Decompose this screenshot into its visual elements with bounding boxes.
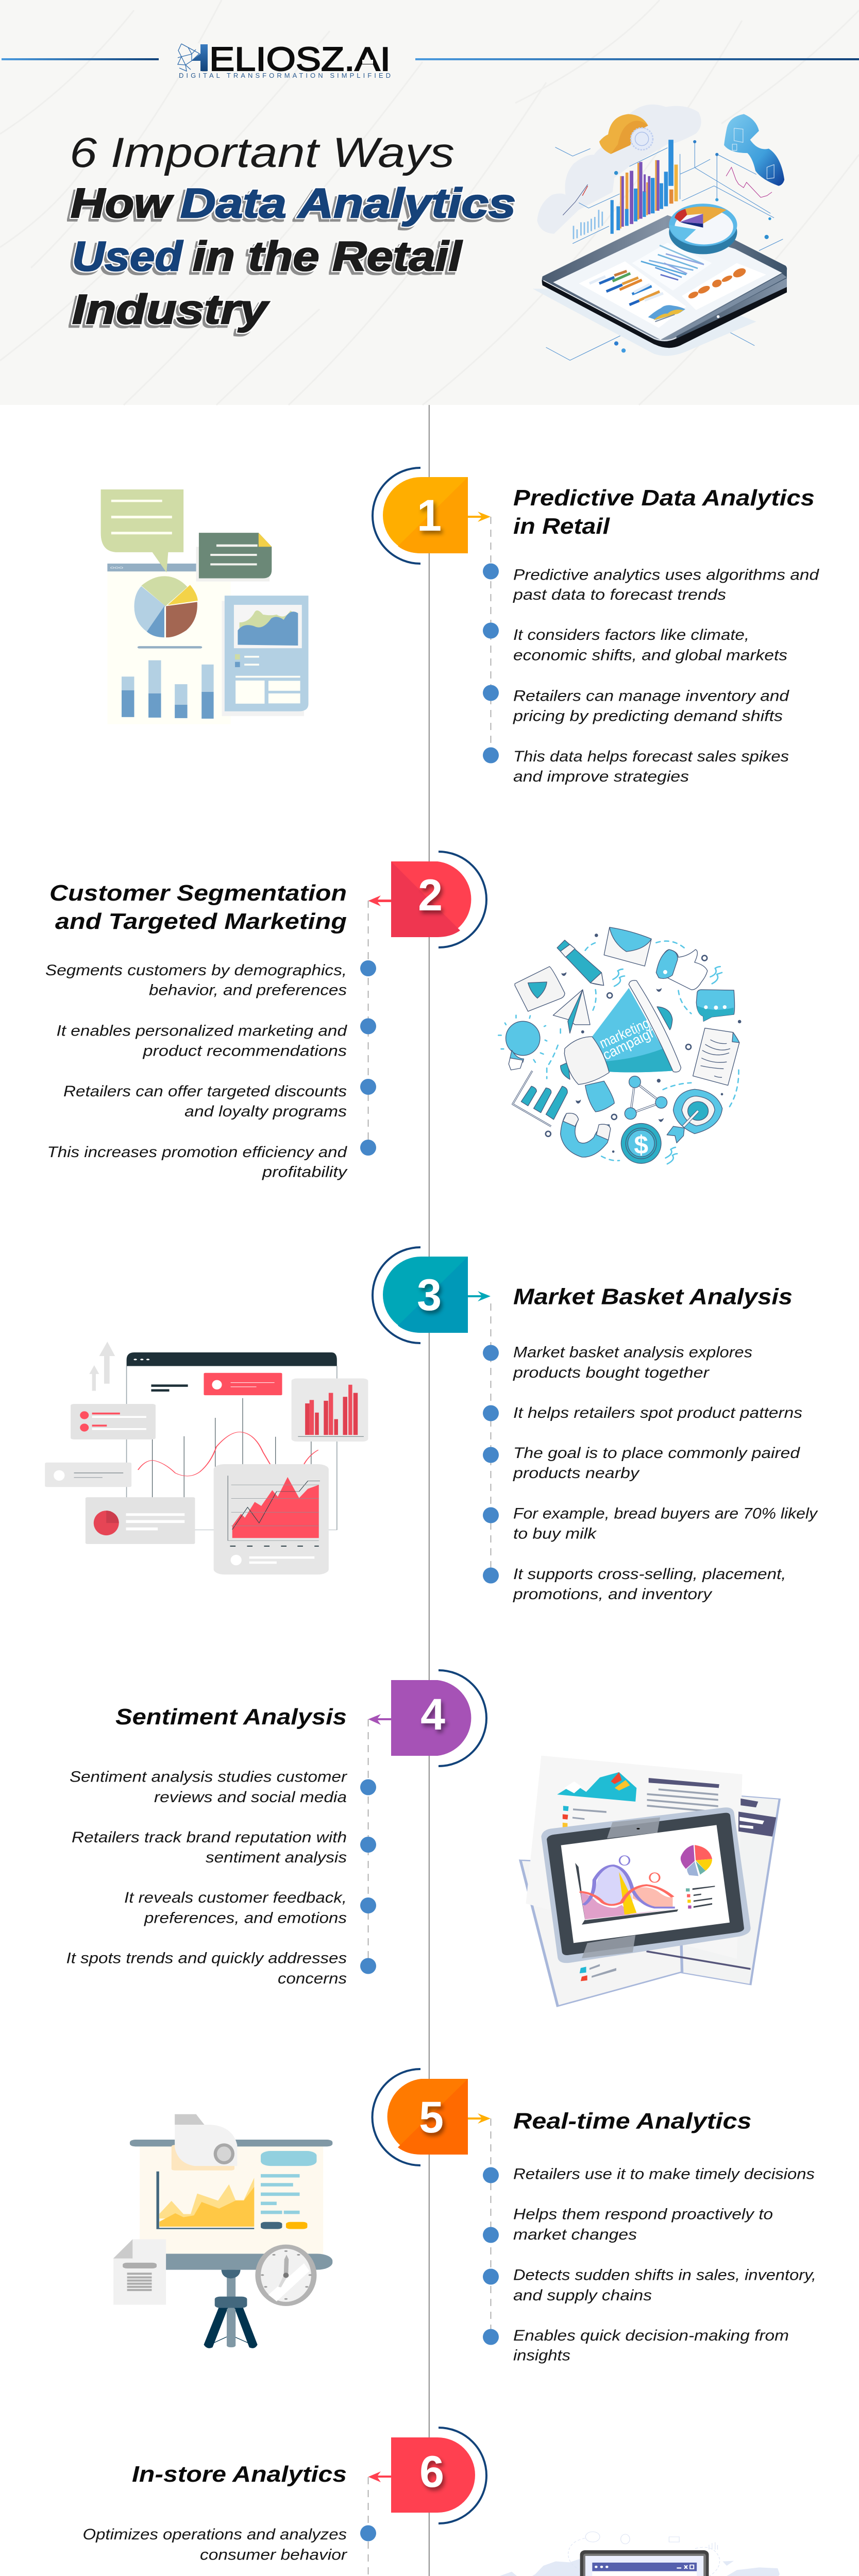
heading: Real-time Analytics — [513, 2108, 751, 2134]
bullet text — [513, 1344, 818, 1603]
bullet text: behavior, and preferences — [149, 982, 347, 998]
number badge 5 — [372, 2069, 468, 2165]
bullet text: The goal is to place commonly paired — [513, 1445, 800, 1462]
arrow — [368, 895, 391, 906]
bullet timeline — [360, 901, 376, 1156]
title — [70, 129, 516, 333]
central timeline line — [429, 405, 430, 2576]
bullet text: profitability — [262, 1163, 348, 1181]
bullet text: Market basket analysis explores — [513, 1344, 752, 1361]
icon: marketing campaign illustration: campaign — [600, 1023, 660, 1063]
bullet text: insights — [513, 2347, 570, 2364]
bullet timeline — [360, 2477, 376, 2576]
arrow — [468, 1291, 491, 1301]
bullet text: consumer behavior — [200, 2546, 347, 2564]
bullet text: For example, bread buyers are 70% likely — [513, 1505, 818, 1522]
number badge 6 — [391, 2428, 486, 2523]
bullet text: and loyalty programs — [184, 1103, 347, 1120]
title: How — [71, 180, 174, 227]
icon: marketing campaign illustration: marketing — [597, 1015, 652, 1052]
bullet timeline — [483, 2119, 499, 2345]
bullet text — [513, 2166, 816, 2364]
title: Industry — [72, 286, 270, 333]
logo: Heliosz.ai header: HELIOSZ.AI — [182, 40, 391, 78]
icon: marketing campaign illustration: $ — [634, 1130, 648, 1159]
arrow — [368, 2471, 391, 2482]
number badge 5: 5 — [419, 2093, 444, 2142]
bullet text: Enables quick decision-making from — [513, 2327, 789, 2344]
bullet text: products bought together — [513, 1364, 710, 1381]
bullet text: It supports cross-selling, placement, — [513, 1566, 786, 1583]
arrow — [468, 2113, 491, 2124]
number badge 3: 3 — [417, 1270, 442, 1320]
number badge 1: 1 — [417, 491, 442, 540]
bullet text — [66, 1768, 347, 1987]
icon: tablet and documents illustration — [520, 1756, 780, 2006]
bullet text: preferences, and emotions — [144, 1909, 347, 1927]
bullet text: to buy milk — [513, 1525, 597, 1543]
bullet text: It spots trends and quickly addresses — [66, 1950, 347, 1967]
bullet text: market changes — [513, 2226, 637, 2243]
bullet text: It reveals customer feedback, — [124, 1889, 347, 1906]
panel: 4 sentiment analysis — [66, 1670, 780, 2006]
bullet text: reviews and social media — [154, 1789, 347, 1806]
bullet text: It considers factors like climate, — [513, 626, 749, 643]
bullet text: Helps them respond proactively to — [513, 2206, 773, 2223]
heading: Customer Segmentation — [49, 880, 347, 906]
bullet text: promotions, and inventory — [513, 1586, 713, 1603]
bullet text: Segments customers by demographics, — [45, 962, 347, 979]
bullet text: sentiment analysis — [206, 1849, 347, 1866]
number badge 3 — [373, 1247, 468, 1343]
number badge 2: 2 — [418, 871, 443, 920]
bullet text: Retailers can offer targeted discounts — [63, 1083, 347, 1100]
panel: 3 market basket analysis — [45, 1247, 818, 1603]
bullet text — [42, 2526, 348, 2576]
header rule lines — [2, 58, 859, 60]
number badge 4 — [391, 1670, 486, 1766]
icon: presentation board illustration — [113, 2114, 332, 2348]
bullet text: past data to forecast trends — [513, 586, 726, 603]
header background — [0, 0, 859, 405]
bullet text: It helps retailers spot product patterns — [513, 1404, 802, 1421]
bullet text: Retailers use it to make timely decisions — [513, 2166, 815, 2182]
bullet text: product recommendations — [142, 1043, 347, 1059]
heading: Sentiment Analysis — [115, 1704, 347, 1730]
heading: Predictive Data Analytics — [513, 485, 815, 511]
panel: 1 predictive data analytics — [101, 468, 819, 785]
bullet timeline — [483, 517, 499, 764]
bullet text: Sentiment analysis studies customer — [70, 1768, 347, 1786]
bullet text: Retailers can manage inventory and — [513, 687, 789, 705]
bullet text: Retailers track brand reputation with — [72, 1829, 347, 1846]
icon: tablet analytics illustration — [533, 105, 787, 360]
bullet text: and improve strategies — [513, 768, 689, 785]
bullet text: economic shifts, and global markets — [513, 647, 787, 664]
bullet timeline — [360, 1719, 376, 1974]
bullet text: This data helps forecast sales spikes — [513, 748, 789, 765]
title: 6 Important Ways — [70, 129, 454, 176]
number badge 4: 4 — [420, 1690, 445, 1739]
bullet timeline — [483, 1303, 499, 1584]
arrow — [468, 512, 491, 522]
icon: phone with world map illustration — [483, 2532, 785, 2576]
arrow — [368, 1714, 391, 1725]
heading — [49, 880, 347, 934]
heading: in Retail — [513, 514, 610, 539]
panel: 5 real-time analytics — [113, 2069, 816, 2364]
heading — [513, 485, 815, 539]
title: Used — [72, 233, 183, 280]
bullet text: Optimizes operations and analyzes — [82, 2526, 347, 2543]
number badge 2 — [391, 852, 486, 947]
heading: In-store Analytics — [132, 2462, 347, 2487]
icon: dashboard charts illustration — [45, 1342, 368, 1574]
bullet text: It enables personalized marketing and — [57, 1022, 347, 1040]
panel: 6 in-store analytics — [42, 2428, 785, 2576]
heading: Market Basket Analysis — [513, 1284, 793, 1310]
title: in the Retail — [193, 233, 463, 280]
heading: and Targeted Marketing — [55, 909, 347, 934]
bullet text: This increases promotion efficiency and — [47, 1144, 347, 1161]
icon: marketing campaign illustration — [498, 927, 741, 1164]
bullet text — [513, 567, 819, 785]
bullet text: concerns — [278, 1970, 347, 1987]
bullet text: and supply chains — [513, 2287, 652, 2304]
logo: Heliosz.ai header: DIGITAL TRANSFORMATION SIMPLIFIED — [179, 72, 391, 79]
bullet text: products nearby — [513, 1465, 640, 1482]
panel: 2 customer segmentation — [45, 852, 741, 1181]
bullet text — [45, 962, 348, 1181]
number badge 6: 6 — [419, 2447, 444, 2497]
bullet text: Predictive analytics uses algorithms and — [513, 567, 819, 583]
number badge 1 — [373, 468, 468, 564]
title: Data Analytics — [180, 180, 516, 227]
bullet text: pricing by predicting demand shifts — [513, 708, 783, 724]
icon: dashboard and reports illustration — [101, 489, 309, 724]
bullet text: Detects sudden shifts in sales, inventory, — [513, 2267, 816, 2283]
